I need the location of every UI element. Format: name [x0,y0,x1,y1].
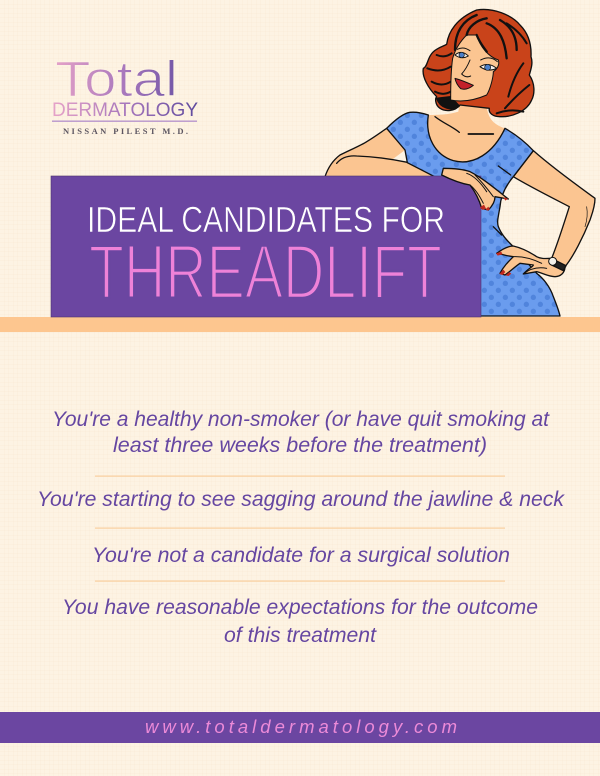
hair [423,9,534,117]
criterion 2: You're starting to see sagging around the jawline & neck [37,488,565,511]
criterion 4: You have reasonable expectations for the outcome [62,596,538,619]
criterion 1: least three weeks before the treatment) [113,434,487,457]
criterion 3: You're not a candidate for a surgical solution [92,544,510,567]
leaning arm [325,128,453,177]
illustration: hand over panel [442,168,508,211]
website url: www.totaldermatology.com [145,716,457,737]
title panel [51,176,481,317]
hair shadows [427,23,529,113]
heading: ideal candidates for: IDEAL CANDIDATES FOR [87,199,445,240]
criterion 1 [52,408,550,457]
heading: threadlift: THREADLIFT [89,230,442,315]
wristwatch [552,259,566,271]
logo: Total [55,51,178,107]
face [451,35,499,101]
neck and chest [428,93,505,162]
list of criteria [37,408,565,647]
arm: hand on hip [513,151,595,267]
dress [387,112,560,316]
logo: NISSAN PILEST M.D. [63,126,188,136]
nose [462,60,471,77]
criterion 1: You're a healthy non-smoker (or have quit smoking at [52,408,550,431]
hand on hip [497,246,565,277]
eye [480,65,497,70]
peach band [0,317,600,332]
logo [52,51,198,136]
footer bar [0,712,600,743]
eye [455,52,468,58]
criterion 4: of this treatment [224,624,377,647]
illustration: woman [325,9,595,316]
criterion 4 [62,596,538,647]
hair strands [455,15,517,58]
lips [455,78,473,89]
logo: DERMATOLOGY [52,99,198,121]
